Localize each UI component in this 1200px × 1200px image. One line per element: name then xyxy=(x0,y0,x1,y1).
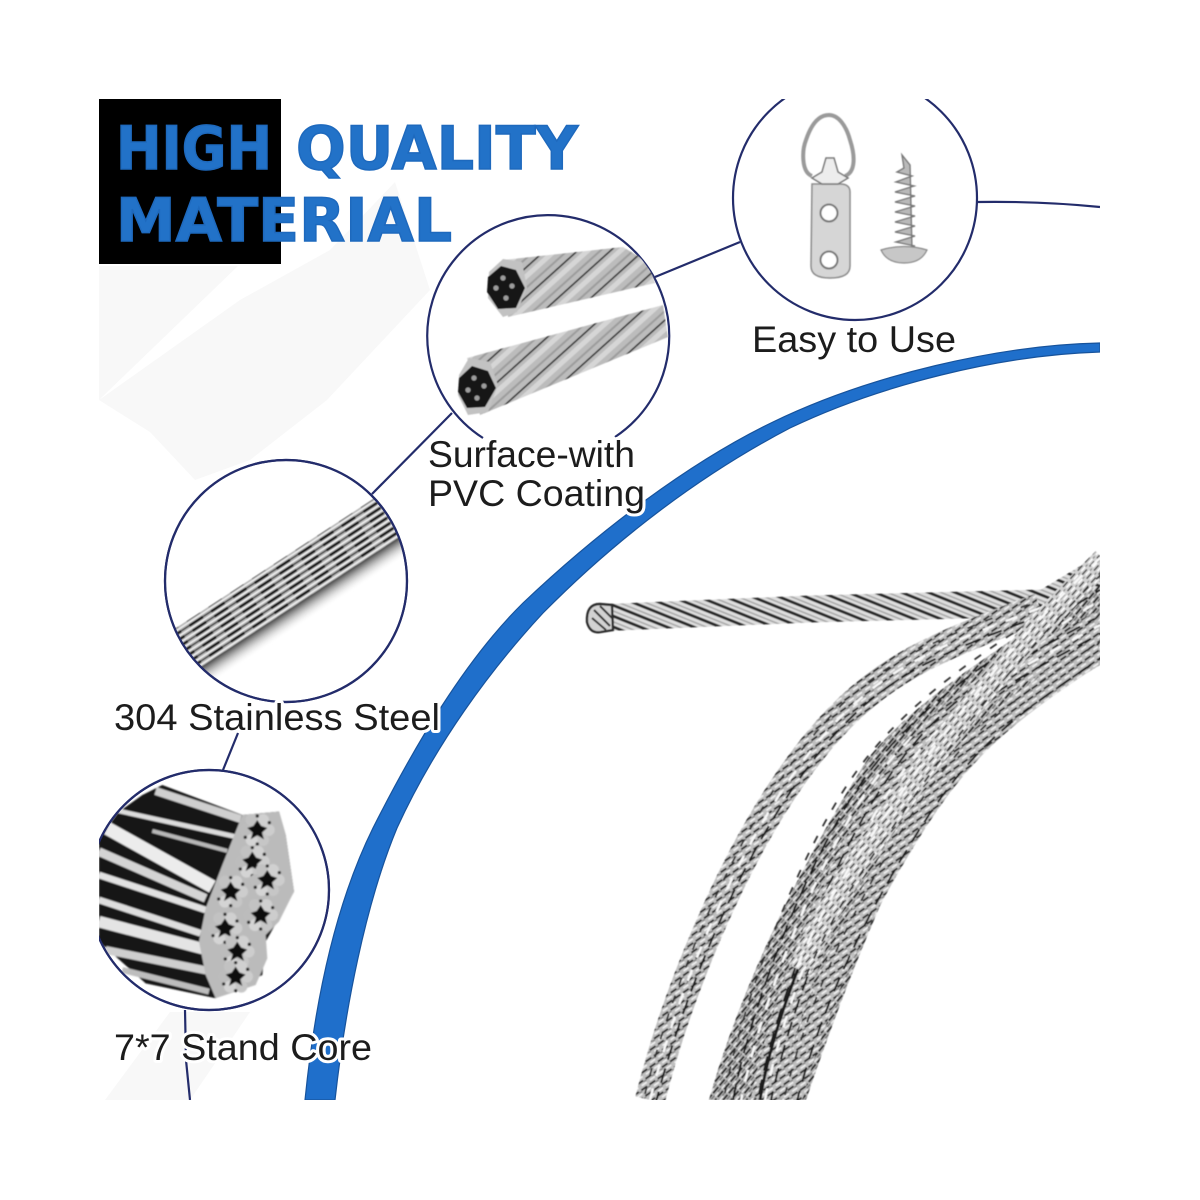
cable strand 4 xyxy=(785,645,1106,1105)
circle: easy to use xyxy=(733,76,977,320)
circle: 304 stainless steel xyxy=(165,460,413,702)
label: 7*7 stand core: 7*7 Stand Core xyxy=(114,1027,372,1068)
stainless cable xyxy=(176,498,402,676)
core cable xyxy=(99,785,294,998)
title: HIGH QUALITY MATERIAL xyxy=(120,124,580,242)
label: easy to use: Easy to Use xyxy=(752,319,956,360)
connector lines xyxy=(185,202,1100,1100)
cable strand 5 xyxy=(797,557,1110,976)
cable bundle body xyxy=(709,585,1100,1100)
cable strand 1 xyxy=(645,602,1045,1106)
icon: screw xyxy=(881,155,927,263)
black title block xyxy=(99,99,281,264)
title: HIGH QUALITY MATERIAL: MATERIAL xyxy=(116,186,452,256)
title: HIGH QUALITY MATERIAL: HIGH xyxy=(116,114,272,184)
label: PVC coating: PVC Coating xyxy=(428,473,645,514)
label: surface with: Surface-with xyxy=(428,434,635,475)
circle: 7*7 strand core xyxy=(89,770,329,1010)
title: HIGH QUALITY MATERIAL: QUALITY xyxy=(296,114,580,184)
blue arc xyxy=(305,343,1100,1100)
PVC cable pair xyxy=(458,247,668,415)
main cable bundle xyxy=(587,557,1110,1106)
cable strand 2 xyxy=(725,583,1107,1106)
label: 304 stainless steel: 304 Stainless Steel xyxy=(114,697,440,738)
cable strand 3 xyxy=(759,619,1105,1106)
icon: D-ring hanger xyxy=(803,115,854,278)
short cable end xyxy=(587,570,1100,632)
strand gap line xyxy=(758,968,800,1100)
circle: PVC coated cable xyxy=(427,215,669,438)
background: faint diagonal panels xyxy=(99,182,430,1100)
